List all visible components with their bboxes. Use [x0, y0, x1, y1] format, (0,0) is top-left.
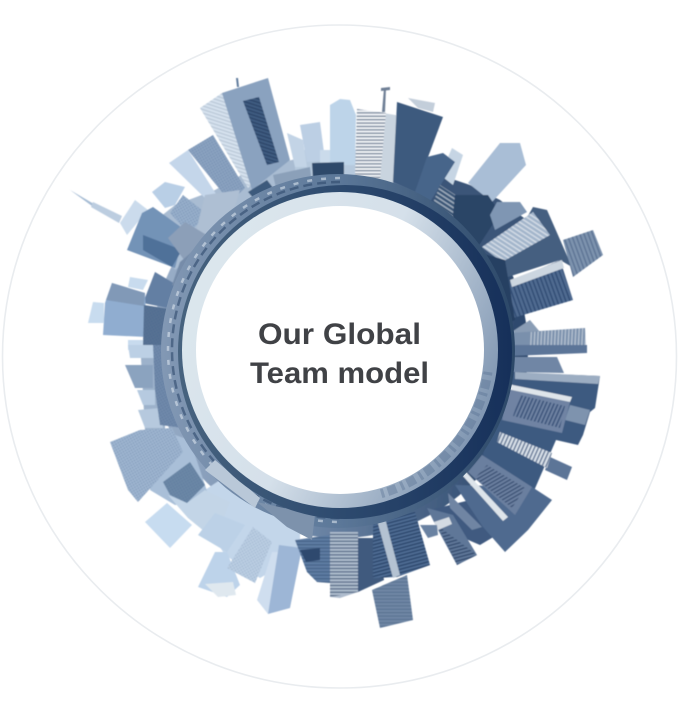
white centre disc: [196, 206, 484, 494]
buildings: top-right quadrant: [355, 87, 603, 352]
filler masses behind buildings: [140, 150, 540, 578]
ring: pale road blocks lower-left: [205, 460, 315, 540]
buildings: bottom-left quadrant: [110, 345, 330, 614]
title: Our Global: [258, 318, 421, 351]
ring: dark inner edge: [178, 185, 512, 519]
buildings: bottom-right quadrant: [330, 345, 600, 628]
buildings: top-left quadrant: [70, 78, 356, 350]
ring: road disc: [161, 174, 515, 528]
ring: pale inner band: [182, 192, 498, 508]
skyline base underlay: [152, 162, 528, 538]
ring: mottled texture lower-right: [380, 372, 488, 494]
city skyline around the ring: [70, 78, 603, 628]
ring: road details upper-left and lower-left: [168, 178, 340, 522]
title: [250, 318, 429, 390]
title: Team model: [250, 357, 429, 390]
